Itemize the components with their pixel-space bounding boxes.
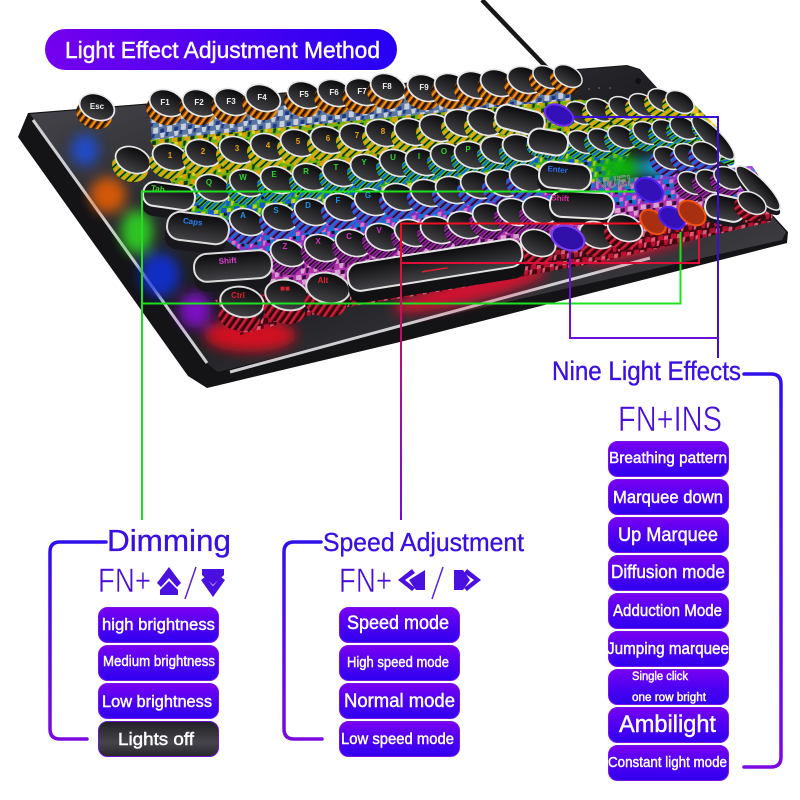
shift key row: V [376, 226, 382, 235]
number key row: 8 [381, 127, 386, 136]
button: breathing pattern: Breathing pattern [609, 450, 727, 467]
button: up marquee [608, 518, 728, 552]
bracket connector [744, 374, 781, 767]
button: low speed mode [340, 722, 460, 756]
button: normal mode: Normal mode [344, 691, 455, 712]
tab key [139, 179, 198, 222]
qwerty key row [139, 110, 741, 222]
underglow [71, 134, 701, 352]
crystal switch bands [150, 82, 775, 335]
function key row: F8 [382, 82, 392, 91]
highlighted right key [674, 195, 710, 231]
top plate [30, 66, 786, 372]
button: jumping marquee [607, 632, 729, 666]
divider slash [432, 567, 443, 599]
button: up marquee: Up Marquee [618, 524, 718, 546]
highlighted up key [631, 173, 667, 207]
highlighted FN key [548, 221, 588, 255]
band: shift row [268, 197, 708, 288]
button: normal mode [340, 684, 460, 718]
band: function row [150, 90, 572, 140]
button: single click one row bright: one row bright [632, 692, 707, 704]
number key row: 5 [296, 137, 301, 146]
shift key row [192, 159, 787, 293]
function key row: Esc [90, 102, 105, 111]
highlighted INS key [541, 100, 577, 130]
right cluster keys [701, 191, 748, 229]
heading: speed adjustment: Speed Adjustment [323, 527, 525, 557]
function key row: F2 [194, 98, 204, 107]
title pill [45, 29, 397, 70]
button: constant light mode [608, 746, 728, 780]
key combo: FN+ [339, 562, 392, 600]
title pill: Light Effect Adjustment Method [65, 37, 380, 63]
button: medium brightness: Medium brightness [103, 654, 215, 670]
bottom key row: Ctrl [231, 291, 245, 300]
key combo: FN+INS [618, 400, 722, 439]
button: marquee down [608, 480, 728, 514]
number key row: 2 [201, 147, 206, 156]
button: ambilight [608, 708, 728, 742]
band: bottom row [215, 208, 775, 335]
button: single click one row bright [608, 670, 728, 704]
blue effects guide [570, 117, 718, 358]
shift key row: X [315, 237, 321, 246]
backslash key [525, 126, 571, 161]
function key row: F1 [160, 98, 170, 107]
home key row: S [273, 206, 279, 215]
band: qwerty row [188, 152, 630, 222]
left shift key: Shift [218, 256, 237, 266]
button: adduction mode: Adduction Mode [613, 601, 722, 620]
icon: left arrow [398, 569, 425, 591]
space bar [345, 236, 527, 305]
qwerty key row: U [390, 153, 396, 162]
number key row: 6 [326, 134, 331, 143]
button: adduction mode [608, 594, 728, 628]
qwerty key row: Q [206, 178, 212, 187]
home key row: A [240, 211, 246, 220]
function key row: F9 [419, 83, 429, 92]
button: speed mode [340, 608, 460, 642]
icon: down arrow [201, 569, 225, 597]
qwerty key row: T [334, 163, 339, 172]
bracket connector [284, 542, 322, 739]
button: low brightness: Low brightness [102, 692, 212, 711]
enter key [536, 159, 593, 198]
tab key: Tab [151, 183, 165, 194]
button: lights off: Lights off [118, 729, 194, 749]
bracket connector [50, 542, 106, 739]
home key row: G [365, 191, 371, 200]
button: breathing pattern [608, 442, 728, 476]
button: speed mode: Speed mode [347, 613, 449, 634]
qwerty key row: E [271, 170, 277, 179]
qwerty key row: W [239, 173, 247, 182]
function key row: F4 [257, 93, 267, 102]
band: number row [150, 95, 725, 190]
qwerty key row: O [441, 147, 447, 156]
button: ambilight: Ambilight [619, 711, 716, 738]
right shift key [548, 189, 616, 227]
left shift key [192, 248, 275, 293]
bottom key row: Alt [318, 276, 329, 285]
button: high speed mode: High speed mode [347, 655, 449, 671]
band: home row [226, 166, 759, 253]
button: medium brightness [98, 646, 218, 680]
button: low brightness [98, 684, 218, 718]
function key row: F3 [226, 97, 236, 106]
divider slash [185, 567, 196, 599]
home key row [163, 136, 725, 256]
qwerty key row: R [303, 167, 309, 176]
number key row [108, 83, 699, 187]
highlighted left key [636, 205, 670, 239]
button: high brightness [98, 608, 218, 642]
button: high brightness: high brightness [102, 615, 215, 634]
green dimming guide [142, 192, 680, 520]
button: jumping marquee: Jumping marquee [607, 639, 729, 658]
key combo: FN+ [98, 562, 151, 600]
number key row: 3 [235, 144, 240, 153]
panel: nine light effects [552, 356, 781, 780]
qwerty key row: Y [361, 158, 367, 167]
panel: dimming [50, 523, 231, 756]
qwerty key row: I [418, 152, 420, 161]
heading: nine light effects: Nine Light Effects [552, 356, 741, 386]
button: low speed mode: Low speed mode [341, 731, 454, 748]
button: marquee down: Marquee down [613, 487, 723, 507]
green and cyan glow behind enter [598, 155, 668, 181]
number key row: 4 [266, 141, 271, 150]
button: diffusion mode: Diffusion mode [611, 562, 725, 582]
panel: speed adjustment [284, 527, 525, 756]
bottom key row: ■■ [280, 284, 290, 293]
button: constant light mode: Constant light mode [608, 754, 727, 771]
icon: up arrow [157, 567, 181, 595]
highlighted down key [655, 203, 689, 233]
number key row: 1 [168, 151, 173, 160]
qwerty key row: P [465, 145, 471, 154]
button: lights off [98, 722, 218, 756]
button: diffusion mode [608, 556, 728, 590]
caps lock key: Caps [182, 216, 204, 228]
heading: dimming: Dimming [107, 523, 231, 558]
function key row: F6 [329, 88, 339, 97]
button: high speed mode [340, 646, 460, 680]
function key row: F7 [357, 87, 367, 96]
shift key row: C [346, 232, 352, 241]
backspace key [490, 101, 548, 144]
enter key: Enter [547, 164, 568, 175]
shift key row: Z [283, 242, 288, 251]
status lights [588, 78, 641, 90]
purple effects guide [570, 250, 718, 338]
keyboard photo illustration [18, 0, 788, 520]
red speed guide [401, 224, 699, 520]
button: single click one row bright: Single click [632, 671, 688, 683]
right shift key: Shift [551, 193, 570, 203]
function key row: F5 [299, 90, 309, 99]
home key row: D [305, 201, 311, 210]
brand logo: NUEL [595, 172, 636, 193]
caps lock key [163, 209, 232, 256]
usb cable [482, 0, 547, 68]
keyboard case [18, 65, 788, 388]
bottom key row [216, 186, 771, 334]
function key row [72, 59, 587, 134]
number key row: 7 [355, 131, 360, 140]
edge highlight [33, 120, 650, 372]
icon: right arrow [454, 569, 481, 591]
home key row: F [336, 196, 341, 205]
